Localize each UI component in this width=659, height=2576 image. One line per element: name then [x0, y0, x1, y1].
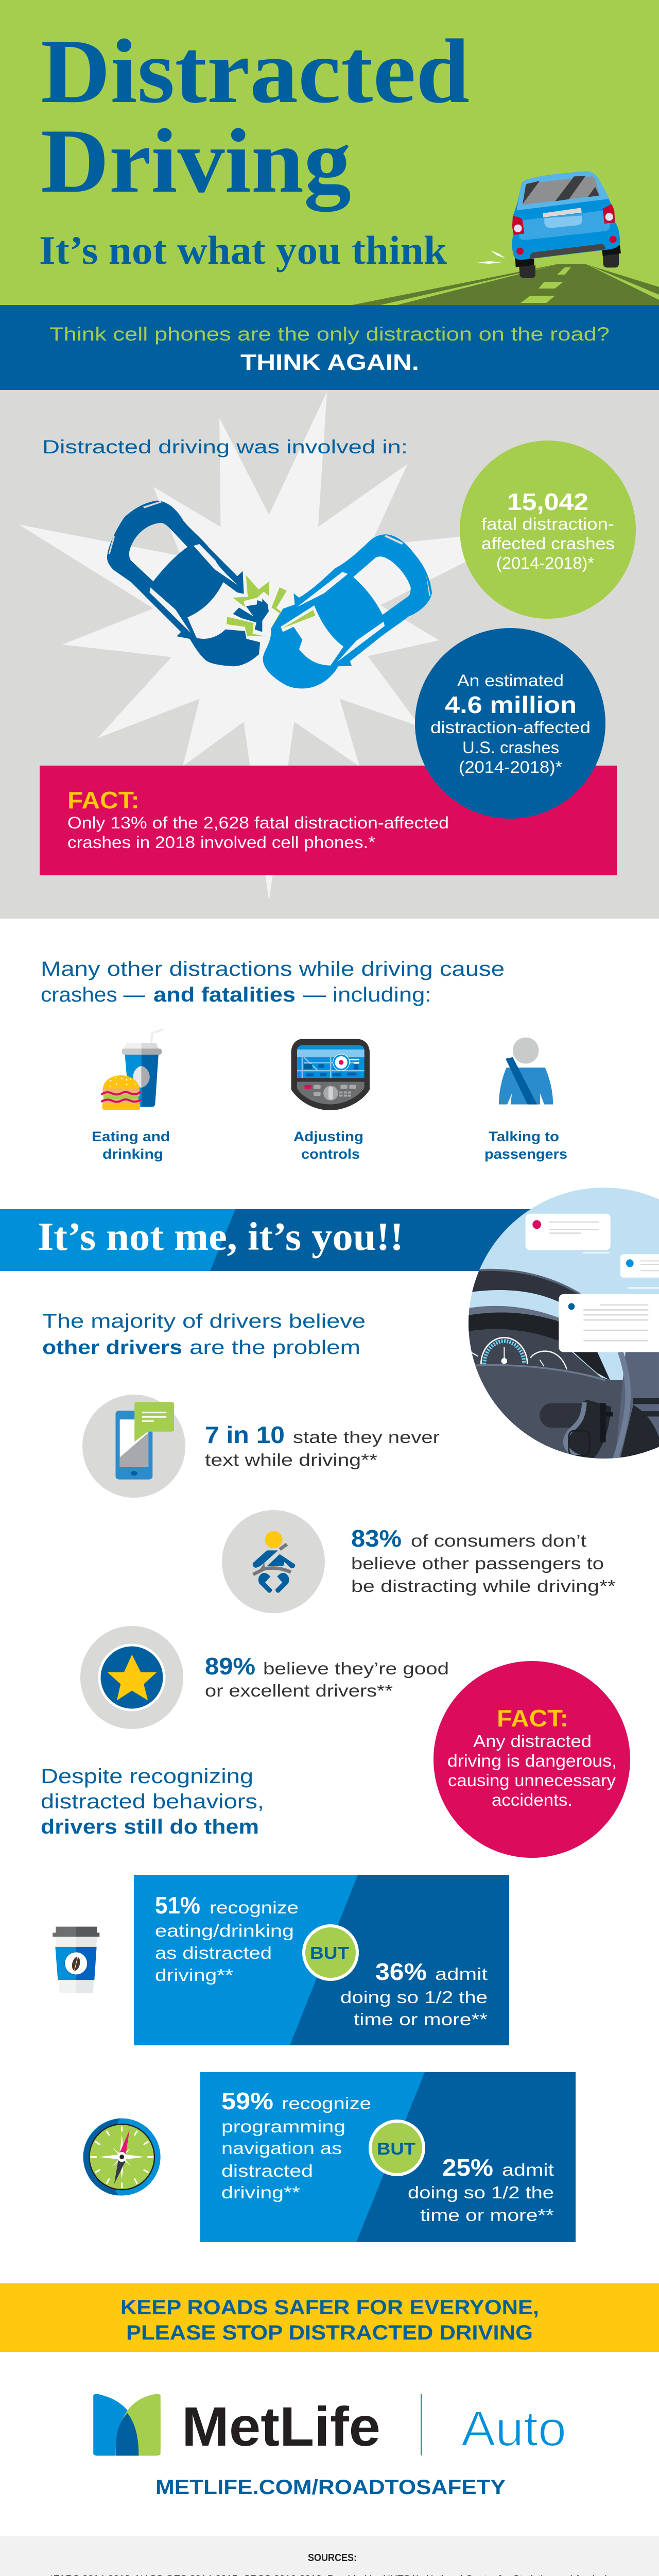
- text: 51% recognize: driving**: [155, 1965, 233, 1985]
- text: 51% recognize: recognize: [210, 1898, 299, 1917]
- title: Distracted: [41, 20, 470, 122]
- badge: but: [370, 2121, 424, 2175]
- text: 25% admit: 25%: [442, 2154, 493, 2181]
- yellow call to action band: KEEP ROADS SAFER FOR EVERYONE,: [120, 2296, 539, 2319]
- stat: 83%: 83%: [351, 1525, 402, 1552]
- text: 51% recognize: eating/drinking: [155, 1921, 294, 1940]
- icon: burger and drink: [102, 1029, 163, 1110]
- text: 51% recognize: as distracted: [155, 1943, 272, 1962]
- heading: other drivers are the problem: The majority of drivers believe: [42, 1311, 366, 1332]
- text: 25% admit: [408, 2154, 554, 2225]
- logo: MetLife Auto: Auto: [461, 2401, 566, 2456]
- intro question: Think cell phones are the only distraction on the road?: [49, 324, 610, 345]
- text: 36% admit: time or more**: [354, 2010, 488, 2029]
- text: 59% recognize: 59%: [221, 2088, 273, 2114]
- heading: many other distractions: and fatalities: [153, 984, 296, 1006]
- callout: 4.6 million crashes: 4.6 million: [445, 691, 577, 718]
- text: 51% recognize: 51%: [155, 1892, 200, 1919]
- yellow call to action band: PLEASE STOP DISTRACTED DRIVING: [126, 2321, 533, 2344]
- callout: 4.6 million crashes: [415, 628, 605, 819]
- stat: 89%: 89%: [205, 1653, 255, 1680]
- stat: 7 in 10: 7 in 10: [205, 1421, 285, 1448]
- heading: drivers still do them: Despite recognizing: [41, 1765, 253, 1788]
- icon: two cars colliding: [107, 501, 432, 688]
- think again: THINK AGAIN.: [240, 350, 419, 375]
- website link: METLIFE.COM/ROADTOSAFETY: [155, 2476, 506, 2499]
- text: 25% admit: doing so 1/2 the: [408, 2183, 554, 2202]
- heading: drivers still do them: drivers still do them: [41, 1816, 259, 1838]
- text: 59% recognize: navigation as: [221, 2139, 342, 2158]
- callout: fact any distracted driving: causing unnecessary: [448, 1771, 616, 1790]
- label: eating and drinking: Eating and: [92, 1129, 170, 1144]
- callout: 4.6 million crashes: (2014-2018)*: [459, 758, 562, 776]
- panel: navigation comparison: [200, 2072, 576, 2242]
- text: 51% recognize: [155, 1892, 299, 1985]
- blue intro band: [0, 305, 659, 390]
- label: adjusting controls: [293, 1129, 363, 1162]
- text: 59% recognize: programming: [221, 2117, 345, 2136]
- heading: drivers still do them: distracted behaviors,: [41, 1790, 264, 1813]
- label: adjusting controls: Adjusting: [293, 1129, 363, 1144]
- icon: phone with text bubble: [82, 1395, 185, 1498]
- text: 59% recognize: recognize: [282, 2094, 371, 2113]
- notification card three: [559, 1294, 659, 1352]
- text: 59% recognize: driving**: [221, 2183, 300, 2202]
- label: eating and drinking: [92, 1129, 170, 1162]
- label: talking to passengers: Talking to: [489, 1129, 559, 1144]
- illustration: dashboard with notifications: [463, 1188, 659, 1469]
- badge: but: BUT: [377, 2139, 415, 2158]
- icon: baby in seat belt: [222, 1510, 325, 1613]
- label: adjusting controls: controls: [301, 1146, 360, 1162]
- heading: many other distractions: Many other distractions while driving cause: [41, 958, 505, 980]
- icon: blue car rear view: [512, 172, 621, 278]
- callout: 4.6 million crashes: U.S. crashes: [462, 738, 559, 757]
- callout: 15,042 fatal crashes: [460, 440, 636, 619]
- heading: many other distractions: [41, 958, 505, 1006]
- title: Driving: [41, 110, 351, 212]
- callout: 15,042 fatal crashes: affected crashes: [481, 534, 615, 553]
- heading: other drivers are the problem: [42, 1311, 366, 1359]
- text: 25% admit: admit: [502, 2160, 554, 2179]
- label: talking to passengers: passengers: [484, 1146, 567, 1162]
- text: 36% admit: doing so 1/2 the: [340, 1988, 488, 2007]
- icon: compass: [83, 2119, 161, 2196]
- heading: drivers still do them: [41, 1765, 264, 1838]
- stat: 83%: of consumers don’t: [411, 1531, 586, 1550]
- stat: 83%: be distracting while driving**: [351, 1577, 616, 1596]
- panel: eating and drinking comparison: [134, 1875, 509, 2045]
- text: 36% admit: 36%: [375, 1958, 427, 1985]
- icon: coffee cup: [53, 1927, 99, 1993]
- heading: many other distractions: crashes —: [41, 984, 145, 1006]
- starburst: [19, 392, 471, 901]
- callout: fact any distracted driving: driving is dangerous,: [447, 1751, 617, 1770]
- logo: MetLife Auto: MetLife: [182, 2395, 380, 2458]
- header panel: [0, 0, 659, 305]
- callout: fact any distracted driving: [433, 1661, 630, 1858]
- callout: fact cell phones: FACT:: [67, 787, 140, 814]
- label: talking to passengers: [484, 1129, 567, 1162]
- panel: crash statistics: [0, 390, 659, 919]
- banner: it's not me, it's you: It’s not me, it’s you!!: [38, 1214, 404, 1259]
- label: eating and drinking: drinking: [102, 1146, 163, 1162]
- icon: motion marks: [477, 250, 506, 264]
- heading: other drivers are the problem: other drivers: [42, 1337, 182, 1359]
- icon: MetLife mark: [93, 2394, 161, 2455]
- stat: 7 in 10: state they never: [293, 1428, 440, 1447]
- callout: 4.6 million crashes: distraction-affected: [430, 718, 591, 737]
- heading: many other distractions: — including:: [303, 984, 431, 1006]
- road: [352, 264, 659, 305]
- stat: 83%: [351, 1525, 616, 1596]
- light car: [263, 534, 432, 688]
- title: [41, 20, 470, 212]
- notification card one: [526, 1214, 611, 1253]
- notification card two: [620, 1254, 659, 1289]
- panel: sources: SOURCES:: [308, 2552, 357, 2564]
- banner: it's not me, it's you: [0, 1209, 546, 1271]
- logo: MetLife Auto: [93, 2394, 566, 2458]
- callout: 4.6 million crashes: An estimated: [457, 671, 564, 690]
- callout: 15,042 fatal crashes: 15,042: [507, 488, 588, 515]
- text: 36% admit: admit: [435, 1964, 488, 1984]
- text: 25% admit: time or more**: [420, 2206, 554, 2225]
- icon: star badge: [80, 1626, 183, 1729]
- heading: other drivers are the problem: are the problem: [189, 1337, 360, 1359]
- icon: passenger with seat belt: [499, 1038, 553, 1105]
- text: 36% admit: [340, 1958, 488, 2029]
- callout: fact cell phones: Only 13% of the 2,628 fatal distraction-affected: [67, 814, 449, 832]
- stat: 89%: [205, 1653, 449, 1700]
- badge: but: [304, 1926, 357, 1979]
- icon: car controls: [291, 1039, 370, 1110]
- subtitle: It’s not what you think: [39, 228, 447, 273]
- callout: fact any distracted driving: Any distracted: [473, 1732, 592, 1751]
- text: 59% recognize: distracted: [221, 2161, 313, 2180]
- dark car: [107, 501, 260, 666]
- yellow call to action band: [0, 2283, 659, 2352]
- stat: 7 in 10: [205, 1421, 440, 1469]
- spark shapes: [227, 575, 287, 636]
- stat: 83%: believe other passengers to: [351, 1554, 604, 1573]
- callout: fact any distracted driving: accidents.: [492, 1790, 573, 1809]
- stat: 89%: believe they’re good: [263, 1659, 449, 1678]
- callout: fact cell phones: [40, 766, 617, 875]
- callout: 15,042 fatal crashes: (2014-2018)*: [496, 554, 594, 572]
- callout: fact cell phones: crashes in 2018 involved cell phones.*: [67, 833, 375, 852]
- stat: 89%: or excellent drivers**: [205, 1681, 393, 1700]
- callout: fact any distracted driving: FACT:: [497, 1705, 568, 1732]
- badge: but: BUT: [310, 1943, 349, 1962]
- callout: 15,042 fatal crashes: fatal distraction-: [481, 515, 614, 533]
- panel: sources: [0, 2536, 659, 2576]
- heading: Distracted driving was involved in:: [42, 436, 408, 457]
- text: 59% recognize: [221, 2088, 371, 2202]
- stat: 7 in 10: text while driving**: [205, 1450, 377, 1469]
